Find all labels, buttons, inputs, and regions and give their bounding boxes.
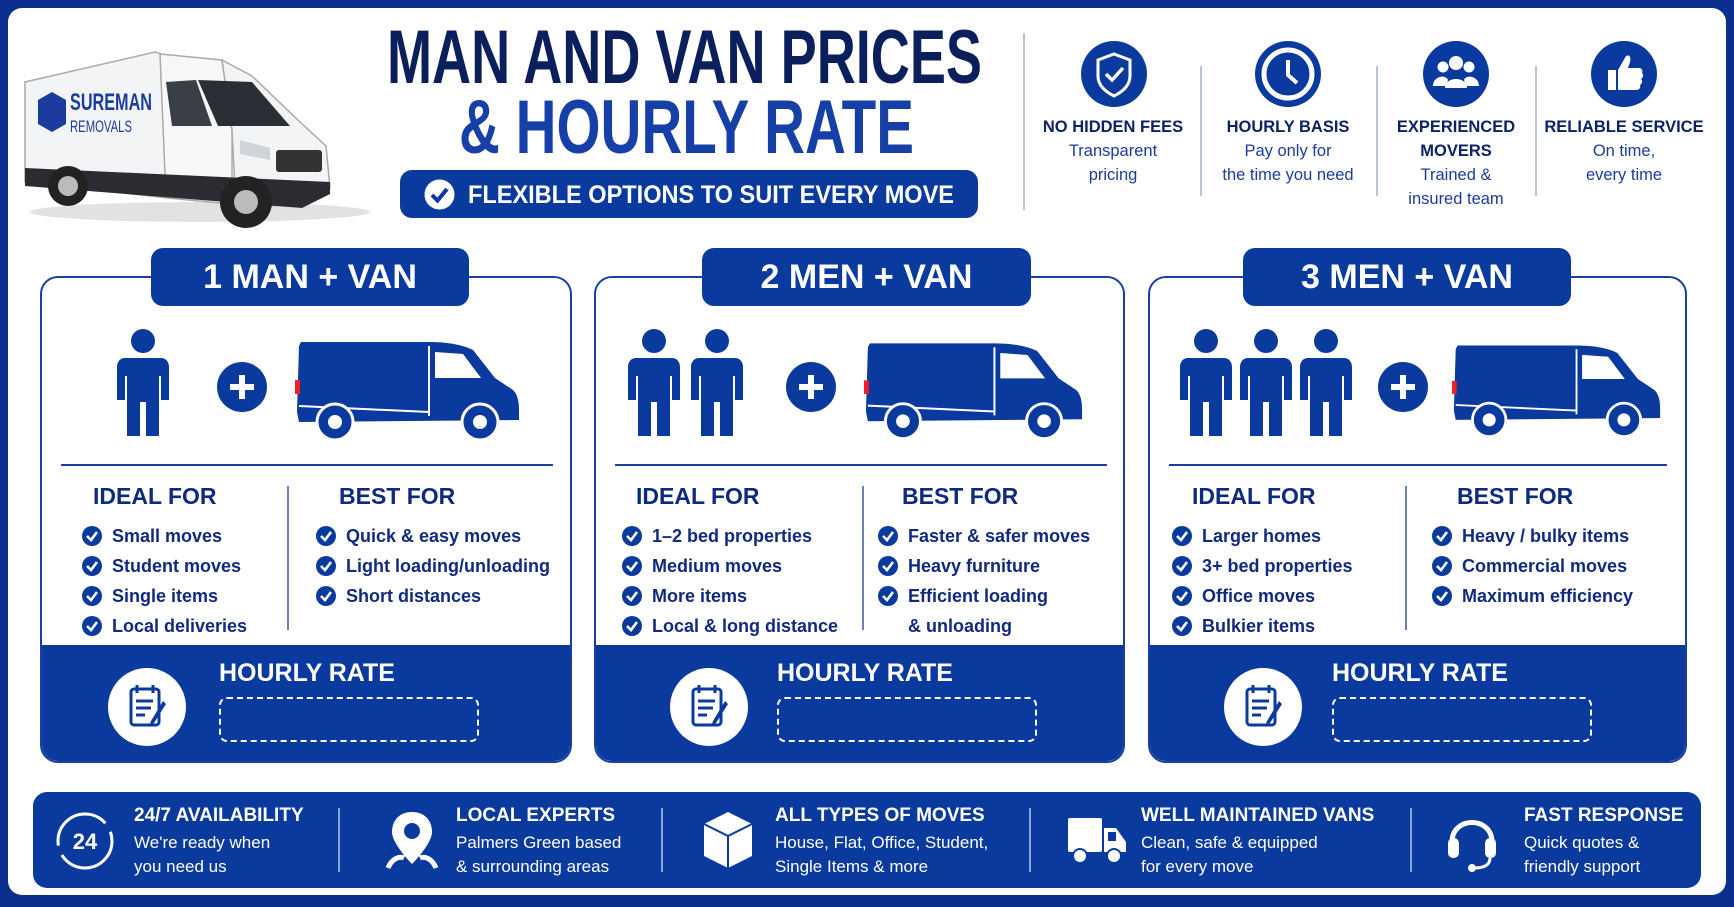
text: ideal for [82,483,247,636]
feature: reliable service: RELIABLE SERVICE [1544,118,1704,136]
bottom item: 24/7: you need us [134,857,227,876]
tab: 1 man + van [151,248,469,306]
text: best for [878,483,1090,636]
icon: notepad [108,668,186,746]
text: best for: Faster & safer moves [908,526,1090,546]
text: best for: Heavy / bulky items [1462,526,1629,546]
icon: location pin [386,812,438,869]
photo: white van with Sureman logo: REMOVALS [70,117,132,136]
feature: experienced movers: MOVERS [1420,142,1492,160]
tab: 1 man + van: 1 MAN + VAN [203,258,417,296]
bottom item: well maintained vans: Clean, safe & equipped [1141,833,1318,852]
bottom item: all types of moves: House, Flat, Office, Student, [775,833,988,852]
photo: white van with Sureman logo [24,51,370,228]
text: ideal for: IDEAL FOR [93,483,217,509]
feature: no hidden fees: NO HIDDEN FEES [1043,118,1183,136]
icon: plus [786,362,836,412]
icon: headset [1448,820,1496,872]
feature: hourly basis: Pay only for [1244,142,1332,160]
text: best for: Heavy furniture [908,556,1040,576]
text: best for: & unloading [908,616,1012,636]
text: ideal for: Small moves [112,526,222,546]
tab: 2 men + van [702,248,1031,306]
hourly rate block [42,645,570,761]
feature: hourly basis: HOURLY BASIS [1227,118,1349,136]
text: best for [1432,483,1633,606]
feature: no hidden fees: pricing [1089,166,1137,184]
text: ideal for: Local & long distance [652,616,838,636]
panel: 1 man + van [40,276,572,763]
feature: experienced movers [1397,41,1515,208]
feature: no hidden fees [1043,41,1183,184]
icon: box [704,812,752,868]
tab: 3 men + van [1243,248,1571,306]
icon: notepad [670,668,748,746]
hourly rate block [1150,645,1685,761]
photo: white van with Sureman logo: SUREMAN [70,89,152,116]
text: best for: Light loading/unloading [346,556,550,576]
text: ideal for [622,483,838,636]
text: best for: Efficient loading [908,586,1048,606]
text: ideal for: More items [652,586,747,606]
bottom item: local experts [386,805,621,876]
text: ideal for: Bulkier items [1202,616,1315,636]
icon: van [1452,346,1660,436]
bottom item: all types of moves [704,805,988,876]
bottom bar [33,792,1701,888]
hourly rate block: HOURLY RATE [219,659,395,687]
feature: no hidden fees: Transparent [1069,142,1157,160]
bottom item: fast response [1448,805,1683,876]
text: best for: BEST FOR [902,483,1018,509]
feature: reliable service: every time [1586,166,1662,184]
text: best for: BEST FOR [1457,483,1573,509]
hourly rate block: HOURLY RATE [777,659,953,687]
icon: persons [1180,329,1352,436]
text: best for: Maximum efficiency [1462,586,1633,606]
text: ideal for: Larger homes [1202,526,1321,546]
feature: reliable service: On time, [1593,142,1655,160]
feature: hourly basis [1222,41,1354,184]
hourly rate block [596,645,1123,761]
icon: plus [217,362,267,412]
icon: thumbs up [1591,41,1657,107]
text: best for: BEST FOR [339,483,455,509]
text: ideal for: Medium moves [652,556,782,576]
bottom item: 24/7: 24/7 AVAILABILITY [134,805,304,826]
feature: hourly basis: the time you need [1222,166,1354,184]
text: ideal for: 1–2 bed properties [652,526,812,546]
text: ideal for: IDEAL FOR [636,483,760,509]
text: best for [316,483,550,606]
bottom item: fast response: Quick quotes & [1524,833,1639,852]
text: ideal for: 3+ bed properties [1202,556,1353,576]
text: ideal for: Office moves [1202,586,1315,606]
icon: clock [1255,41,1321,107]
hourly rate block: HOURLY RATE [1332,659,1508,687]
text: best for: Commercial moves [1462,556,1627,576]
panel: 3 men + van [1148,276,1687,763]
bottom item: fast response: friendly support [1524,857,1640,876]
feature: experienced movers: Trained & [1421,166,1491,184]
tab: 3 men + van: 3 MEN + VAN [1301,258,1513,296]
text: best for: Short distances [346,586,481,606]
icon: persons [628,329,743,436]
feature: experienced movers: EXPERIENCED [1397,118,1515,136]
panel: 2 men + van [594,276,1125,763]
text: ideal for [1172,483,1353,636]
feature: experienced movers: insured team [1408,190,1504,208]
icon: person [117,329,169,436]
text: best for: Quick & easy moves [346,526,521,546]
icon: truck [1068,818,1126,862]
bottom item: 24/7: We're ready when [134,833,270,852]
text: ideal for: Student moves [112,556,241,576]
bottom item: local experts: LOCAL EXPERTS [456,805,615,826]
bottom item: well maintained vans: for every move [1141,857,1253,876]
title [387,20,982,165]
tab: 2 men + van: 2 MEN + VAN [761,258,972,296]
bottom item: well maintained vans [1068,805,1374,876]
icon: 24 clock: 24 [73,829,98,854]
icon: notepad [1224,668,1302,746]
text: ideal for: Local deliveries [112,616,247,636]
icon: 24 clock [56,812,114,870]
bottom item: all types of moves: Single Items & more [775,857,928,876]
icon: van [864,343,1082,438]
bottom item: local experts: & surrounding areas [456,857,609,876]
bottom item: fast response: FAST RESPONSE [1524,805,1683,826]
text: ideal for: IDEAL FOR [1192,483,1316,509]
bottom item: all types of moves: ALL TYPES OF MOVES [775,805,985,826]
text: ideal for: Single items [112,586,218,606]
bottom item: 24/7 [56,805,304,876]
feature: reliable service [1544,41,1704,184]
bottom item: well maintained vans: WELL MAINTAINED VANS [1141,805,1374,826]
icon: shield [1081,41,1147,107]
bottom item: local experts: Palmers Green based [456,833,621,852]
pill: flexible options [400,170,978,218]
icon: plus [1378,362,1428,412]
icon: team [1423,41,1489,107]
icon: van [295,342,519,438]
